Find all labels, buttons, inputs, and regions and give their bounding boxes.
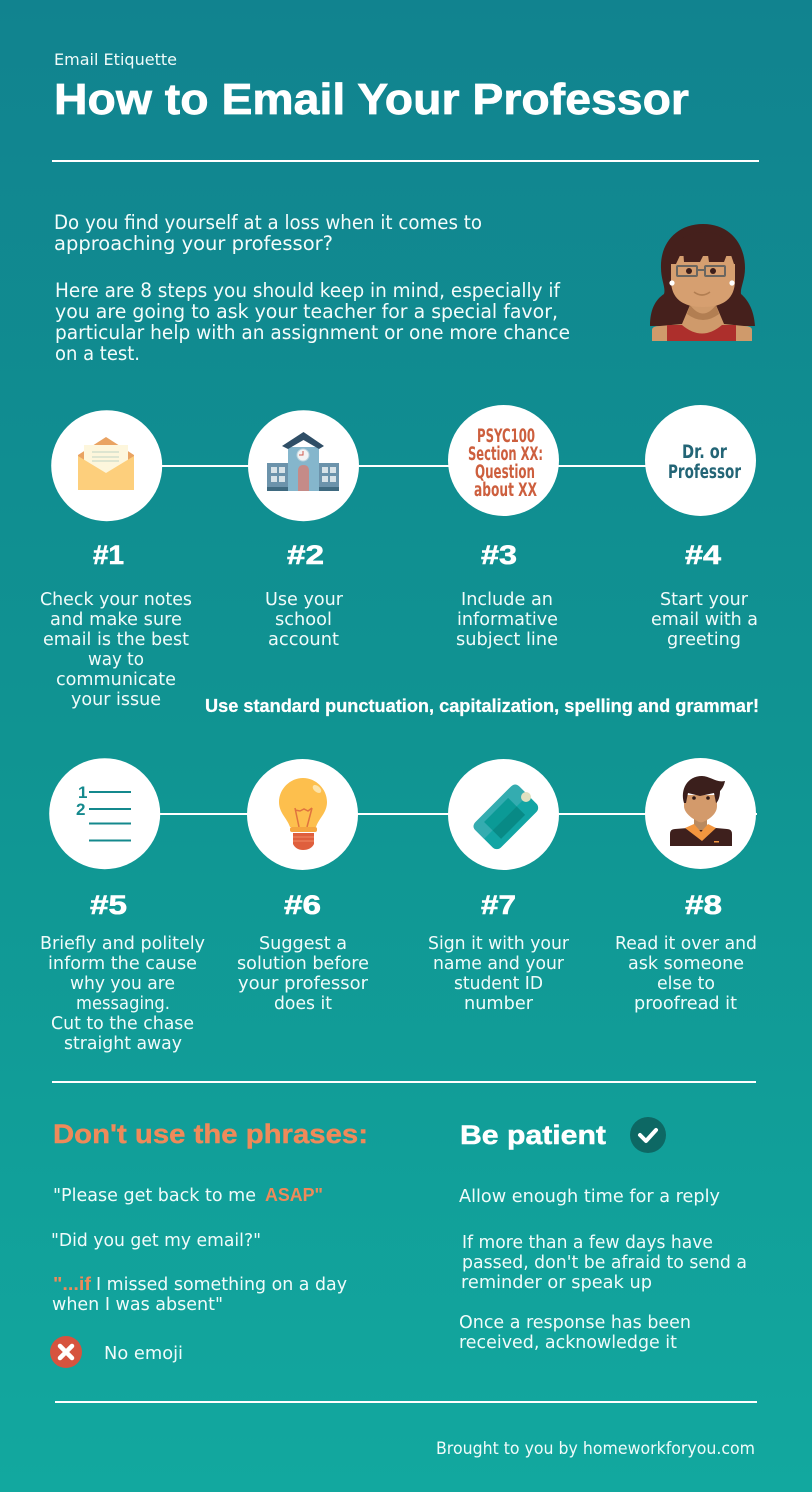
step 7 icon: name tag <box>448 759 559 870</box>
grammar note: Use standard punctuation, capitalization, spelling and grammar! <box>205 695 759 716</box>
intro text: Here are 8 steps you should keep in mind, especially if <box>55 279 561 302</box>
step 2 text: account <box>268 629 339 650</box>
step 6 text: does it <box>274 993 332 1014</box>
step 4 text: Start your <box>660 589 749 610</box>
step 1 text: your issue <box>71 689 161 710</box>
step numbers row 1: #1 <box>93 540 124 570</box>
intro text: particular help with an assignment or one more chance <box>55 321 570 344</box>
step 4 text: email with a <box>651 609 758 630</box>
step numbers row 2: #6 <box>284 890 321 920</box>
step 1 text: and make sure <box>50 609 182 630</box>
heading: be patient: Be patient <box>460 1120 606 1150</box>
step 5 text: inform the cause <box>48 953 197 974</box>
step numbers row 2: #8 <box>685 890 722 920</box>
step numbers row 1 <box>93 540 721 570</box>
tip 2: reminder or speak up <box>461 1272 652 1293</box>
header <box>54 50 689 124</box>
tip 1: Allow enough time for a reply <box>459 1186 720 1207</box>
step numbers row 2 <box>90 890 722 920</box>
step 4 icon: greeting: Professor <box>668 462 742 483</box>
step 6 icon: light bulb <box>247 759 358 870</box>
step 6 text: your professor <box>238 973 369 994</box>
tip 2: passed, don't be afraid to send a <box>462 1252 747 1273</box>
intro text <box>54 211 570 365</box>
phrase 3: when I was absent" <box>52 1294 223 1315</box>
connector row 1 <box>160 465 650 467</box>
step 6 text: Suggest a <box>259 933 347 954</box>
footer credit: Brought to you by homeworkforyou.com <box>436 1439 755 1459</box>
step 5 icon: numbered list: 1 <box>78 783 87 802</box>
step numbers row 1: #3 <box>481 540 517 570</box>
step 3 text: Include an <box>461 589 553 610</box>
step 5 text <box>40 933 205 1054</box>
step 8 icon: student <box>645 758 756 869</box>
step 1 text: email is the best <box>43 629 189 650</box>
phrase 1: ASAP" <box>265 1185 323 1205</box>
step 3 icon: subject line: PSYC100 <box>477 426 535 447</box>
icon: check <box>630 1117 666 1153</box>
phrase 3: I missed something on a day <box>96 1274 347 1295</box>
step 5 text: Cut to the chase <box>51 1013 194 1034</box>
tip 3 <box>459 1312 691 1353</box>
step numbers row 1: #4 <box>685 540 721 570</box>
step 3 icon: subject line <box>448 405 559 516</box>
step 7 text <box>428 933 570 1014</box>
step 2 text <box>265 589 344 650</box>
step 2 text: school <box>275 609 332 630</box>
step 8 text: proofread it <box>634 993 737 1014</box>
step 5 icon: numbered list <box>49 758 160 869</box>
step 1 text <box>40 589 192 710</box>
step 3 icon: subject line: Question <box>475 462 535 483</box>
step 3 text: informative <box>457 609 558 630</box>
connector row 2 <box>155 813 757 815</box>
step numbers row 2: #7 <box>481 890 516 920</box>
step 5 text: why you are <box>70 973 175 994</box>
step 8 text: Read it over and <box>615 933 757 954</box>
intro text: on a test. <box>55 342 140 365</box>
step 5 icon: numbered list: 2 <box>76 800 85 819</box>
step 4 icon: greeting: Dr. or <box>682 442 728 463</box>
heading: don't use the phrases: Don't use the phrases: <box>53 1119 368 1149</box>
step 3 icon: subject line: about XX <box>474 480 537 501</box>
tip 2: If more than a few days have <box>462 1232 713 1253</box>
step 5 text: straight away <box>64 1033 182 1054</box>
phrase 3: "...if <box>53 1274 92 1294</box>
step 6 text: solution before <box>237 953 369 974</box>
step 1 text: communicate <box>56 669 176 690</box>
intro text: approaching your professor? <box>54 232 333 255</box>
intro text: you are going to ask your teacher for a special favor, <box>55 300 558 323</box>
step numbers row 1: #2 <box>287 540 324 570</box>
step 7 text: Sign it with your <box>428 933 570 954</box>
step 7 text: student ID <box>454 973 543 994</box>
step 8 text: else to <box>657 973 715 994</box>
step 1 icon: open envelope <box>51 410 162 521</box>
step 3 icon: subject line: Section XX: <box>468 444 543 465</box>
eyebrow: Email Etiquette <box>54 50 177 69</box>
step 3 text: subject line <box>456 629 558 650</box>
step 8 text <box>615 933 757 1014</box>
step 1 text: Check your notes <box>40 589 192 610</box>
title: How to Email Your Professor <box>54 75 689 124</box>
icon: professor <box>650 224 755 341</box>
phrase 2: "Did you get my email?" <box>51 1230 261 1251</box>
tip 2 <box>461 1232 747 1293</box>
step 5 text: messaging. <box>76 993 170 1014</box>
step 4 icon: greeting <box>645 405 756 516</box>
step numbers row 2: #5 <box>90 890 127 920</box>
step 6 text <box>237 933 369 1014</box>
step 4 text: greeting <box>667 629 741 650</box>
step 4 text <box>651 589 758 650</box>
step 7 text: name and your <box>433 953 565 974</box>
phrase 1: "Please get back to me <box>53 1185 256 1206</box>
icon: no <box>50 1336 82 1368</box>
step 1 text: way to <box>88 649 144 670</box>
phrase 3 <box>52 1274 347 1315</box>
step 7 text: number <box>464 993 534 1014</box>
panel: be patient <box>459 1117 747 1353</box>
step 3 text <box>456 589 558 650</box>
step 2 text: Use your <box>265 589 344 610</box>
tip 3: Once a response has been <box>459 1312 691 1333</box>
panel: phrases to avoid <box>50 1119 368 1368</box>
tip 3: received, acknowledge it <box>459 1332 677 1353</box>
intro text: Do you find yourself at a loss when it comes to <box>54 211 482 234</box>
step 2 icon: school <box>248 410 359 521</box>
step 8 text: ask someone <box>628 953 744 974</box>
step 5 text: Briefly and politely <box>40 933 205 954</box>
no emoji: No emoji <box>104 1343 183 1364</box>
